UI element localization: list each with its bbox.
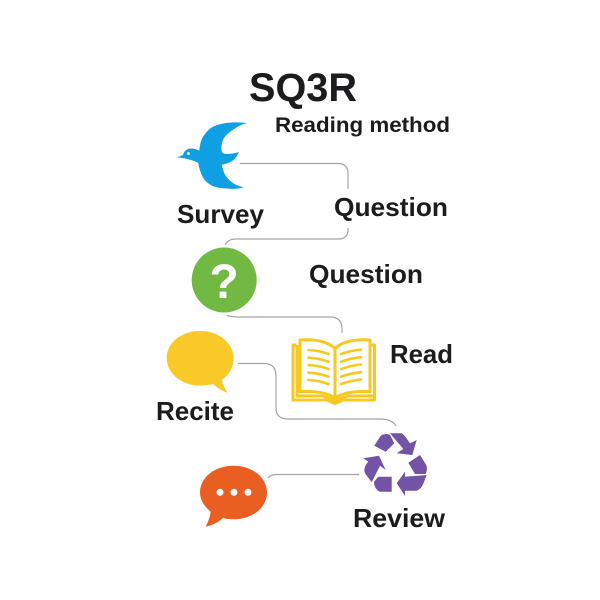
- icon: question mark circle: ?: [209, 256, 239, 309]
- icon: question mark circle: [192, 248, 257, 312]
- label: Review: Review: [353, 503, 446, 533]
- icon: open book: [293, 340, 374, 404]
- subtitle: Reading method: [275, 114, 450, 137]
- title: SQ3R: [249, 66, 357, 110]
- label: Question (upper): Question: [334, 192, 448, 222]
- label: Question (lower): Question: [309, 259, 423, 289]
- icon: yellow speech bubble: [167, 331, 234, 393]
- label: Read: Read: [390, 339, 453, 369]
- label: Recite: Recite: [156, 396, 234, 426]
- label: Survey: Survey: [177, 199, 265, 229]
- icon: orange chat bubble: [200, 466, 267, 527]
- icon: purple recycling arrows: [363, 433, 427, 496]
- icon: blue bird: [177, 122, 247, 189]
